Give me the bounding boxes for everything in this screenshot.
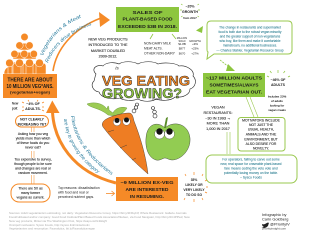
text: survey question: never eat?	[25, 146, 41, 150]
text: vegan restaurants	[203, 106, 233, 131]
panel: motivators: NOT JUST THE	[249, 123, 274, 127]
panel: thought bubble title: in 2019	[152, 97, 162, 101]
callout: growth: ~20%	[185, 4, 195, 8]
callout: new poll: ~4% OF	[26, 102, 41, 106]
callout: former vegans: vegans as current.	[17, 196, 44, 200]
panel: 9 million ex-veg: ~9 MILLION EX-VEG	[120, 180, 174, 186]
panel: operators quote: potentially losing money on the table.	[224, 171, 278, 175]
callout: share of adults: of adults	[271, 99, 283, 103]
panel: motivators	[238, 118, 285, 151]
table: sales by category: MEAT ALTS.	[144, 46, 163, 50]
panel: thought bubble title: GROWING?	[102, 85, 182, 101]
icon: thought trail circles	[132, 103, 157, 118]
callout: growth	[180, 4, 200, 20]
callout: new poll	[12, 100, 44, 111]
panel: quote from Vegetarian Resource Group: food is both due to the robust vegan minority	[219, 30, 282, 34]
panel: sales of plant-based food: PLANT-BASED FOOD	[122, 16, 173, 22]
table: sales by category: NON-DAIRY MILK	[144, 42, 172, 46]
text: expense of surveys: and changes are real or	[15, 166, 52, 170]
arrow: large curve up to veg*ans box	[46, 100, 116, 183]
text: credits: @PriorityIV	[270, 222, 290, 226]
text: new veg products: MARKET DOUBLED	[91, 49, 125, 53]
panel: operators quote: new, real space for craveable plant-based	[220, 162, 282, 166]
callout: likely to resume: VERY LIKELY	[183, 188, 205, 192]
callout: former vegans: There are 5X as	[18, 186, 43, 190]
text: expense of surveys: though people to be sure	[14, 162, 52, 166]
panel: motivators: USUAL HEALTH,	[248, 128, 274, 132]
table: sales by category: $1.8B	[178, 42, 186, 46]
text: sources	[9, 211, 191, 230]
callout: not clearly increasing yet	[16, 116, 48, 127]
text: expense of surveys: Too expensive to survey,	[14, 158, 52, 162]
text: new veg products: INTRODUCED TO THE	[89, 43, 128, 47]
text: top reasons: with food and real or	[58, 190, 90, 194]
callout: share of adults: Includes 23%	[268, 94, 287, 98]
panel: 10 million veg*ans: (vegetarian+vegan)	[10, 90, 51, 94]
callout: share of adults: ADULTS	[271, 83, 286, 87]
callout: new poll: poll:	[12, 106, 18, 110]
text: vegan restaurants: ~30 IN 1993 →	[205, 116, 231, 120]
table: sales by category: $670	[179, 52, 186, 56]
panel: quote from Vegetarian Resource Group: and the greater support of non-vegetarians	[220, 34, 281, 38]
text: vegan restaurants: 1,000 IN 2017	[206, 127, 230, 131]
panel: thought bubble title: VEG EATING	[102, 72, 190, 88]
panel: 9 million ex-veg: IN RESUMING.	[130, 194, 164, 200]
callout: growth: from 2017	[183, 16, 197, 20]
text: survey question: Asking how you veg	[18, 132, 48, 136]
panel: 10 million veg*ans	[3, 74, 57, 98]
panel: 117 million adults: EAT VEGETARIAN OUT.	[206, 90, 262, 96]
callout: new poll: New	[12, 102, 19, 106]
panel: sales of plant-based food	[116, 7, 179, 32]
panel: motivators: ANIMALS AND THE	[246, 132, 277, 136]
text: top reasons: perceived nutrient gaps.	[58, 195, 94, 199]
text: vegan restaurants: RESTAURANTS:	[203, 111, 233, 115]
table: sales by category: OTHER NON-DAIRY	[144, 52, 176, 56]
panel: 117 million adults: ~117 MILLION ADULTS	[206, 76, 263, 82]
panel: quote from Vegetarian Resource Group: — Charles Stahler, Vegetarian Resource Group	[216, 48, 284, 52]
connectors: left column	[32, 127, 34, 184]
panel: sales of plant-based food: SALES OF	[132, 10, 163, 15]
text: survey question: yields more than which	[16, 136, 50, 140]
text: curved note top: Reducers drive business	[45, 22, 92, 63]
text: new veg products: NEW VEG PRODUCTS	[88, 37, 128, 41]
text: curved note top: Vegetarians & Meat	[40, 14, 81, 55]
panel: 117 million adults	[203, 73, 265, 97]
panel: motivators: NOVELTY.	[253, 146, 269, 150]
panel: thought bubble title	[92, 62, 195, 101]
text: sources: Food/cultivated and/or company: Good Food Institute/Plant Based Foods Association/Nielsen, via Food Navigator, http://bit.ly/2C4PPwd; New	[9, 215, 191, 219]
panel: sales of plant-based food: EXCEEDED $3B IN 2018.	[118, 24, 177, 29]
panel: 10 million veg*ans: THERE ARE ABOUT	[8, 78, 52, 84]
callout: likely to resume: TO DO SO	[186, 193, 202, 197]
callout: share of adults: vegan meals	[268, 108, 286, 112]
callout: new poll: ADULTS.	[25, 107, 41, 111]
callout: share of adults: ~46% OF	[271, 78, 286, 82]
panel: motivators: ALSO DESIRE FOR	[246, 142, 277, 146]
callout: likely to resume	[183, 172, 208, 202]
table: sales by category	[144, 36, 201, 56]
table: sales by category: GROWTH	[189, 39, 201, 43]
panel: 117 million adults: SOMETIMES/ALWAYS	[210, 82, 259, 88]
panel: operators quote: – Sysco Foods	[240, 176, 262, 180]
icon: carrot character	[87, 103, 148, 174]
table: sales by category: MILLION	[177, 36, 187, 40]
callout: likely to resume: 35%	[191, 178, 197, 182]
table: sales by category: +27%	[191, 52, 199, 56]
text: curved note lower: are key to growing the category	[64, 119, 100, 173]
callout: not clearly increasing yet: NOT CLEARLY	[20, 117, 45, 121]
text: curved note lower: Flexitarians & Reductarians	[71, 116, 113, 175]
text: vegan restaurants: VEGAN	[211, 106, 225, 110]
text: credits: Carin Goldberg	[262, 216, 288, 222]
panel: thought bubble title: Is	[115, 66, 119, 70]
table: sales by category: +9%	[192, 42, 198, 46]
text: vegan restaurants: MORE THAN	[207, 122, 230, 126]
panel: operators quote	[206, 155, 297, 183]
text: credits	[262, 212, 290, 230]
callout: former vegans: many former	[21, 191, 41, 195]
text: credits: Infographic by	[262, 212, 286, 217]
text: sources: Sources: Adult vegetarianism estimating, not dairy: Vegetarian Resource Group, https://bit.ly/2FRqJ4f; Whole Restaurant: Gallerie Journals	[9, 211, 187, 215]
panel: motivators: MOTIVATORS INCLUDE	[242, 118, 281, 122]
text: top reasons: Top reasons: dissatisfaction	[58, 186, 100, 190]
panel: quote from Vegetarian Resource Group: mainstream, no additional businesses.	[223, 44, 277, 48]
panel: 9 million ex-veg: ARE INTERESTED	[126, 187, 169, 193]
connectors: green double lines	[227, 97, 258, 154]
panel: motivators: ENVIRONMENT, BUT	[244, 138, 278, 142]
table: sales by category: SOLD	[178, 39, 186, 43]
panel: operators quote: For operators, failing to carve out some	[222, 158, 280, 162]
callout: share of adults	[267, 70, 290, 112]
panel: 9 million ex-veg	[116, 177, 178, 201]
callout: former vegans	[11, 184, 50, 202]
callout: share of adults: looking for	[270, 104, 284, 108]
arrow: quote to adults box	[220, 60, 235, 71]
icon: apple character	[146, 117, 190, 160]
panel: operators quote: fare means ceding the veto vote and	[224, 166, 278, 170]
text: sources: New veg products, Mintel via The Washington Post, https://wapo.st/2L3Hkg5	[9, 219, 107, 223]
text: survey question: of these foods do you	[17, 141, 49, 145]
text: top reasons	[58, 186, 100, 199]
text: expense of surveys	[14, 158, 52, 175]
callout: not clearly increasing yet: INCREASING YET	[18, 122, 47, 126]
text: new veg products: 2009-2012.	[99, 54, 117, 58]
table: sales by category: $877	[179, 46, 186, 50]
callout: growth: GROWTH	[182, 10, 198, 14]
panel: quote from Vegetarian Resource Group: The change in restaurants and supermarket	[219, 26, 281, 30]
text: sources: Omnipoll motivators: Sysco Foods, http://sysco.link/mintelmotiv	[9, 223, 90, 227]
text: expense of surveys: random movement.	[18, 171, 48, 175]
panel: 10 million veg*ans: 10 MILLION VEG*ANS.	[6, 84, 54, 90]
callout: likely to resume: LIKELY OR	[185, 183, 203, 187]
arrow: green to quote	[196, 26, 203, 33]
panel: quote from Vegetarian Resource Group: who buy, like them and make it comfortable	[219, 39, 281, 43]
arrow: top arc to plant-based sales	[53, 12, 110, 71]
arrow: reasons to ex-veg	[106, 191, 114, 196]
panel: quote from Vegetarian Resource Group	[207, 21, 292, 59]
table: sales by category: +23%	[191, 46, 199, 50]
icon: pyramid of people	[4, 33, 46, 74]
text: survey question	[16, 132, 50, 150]
green rays below sales box	[150, 34, 176, 39]
text: new veg products	[88, 37, 128, 58]
